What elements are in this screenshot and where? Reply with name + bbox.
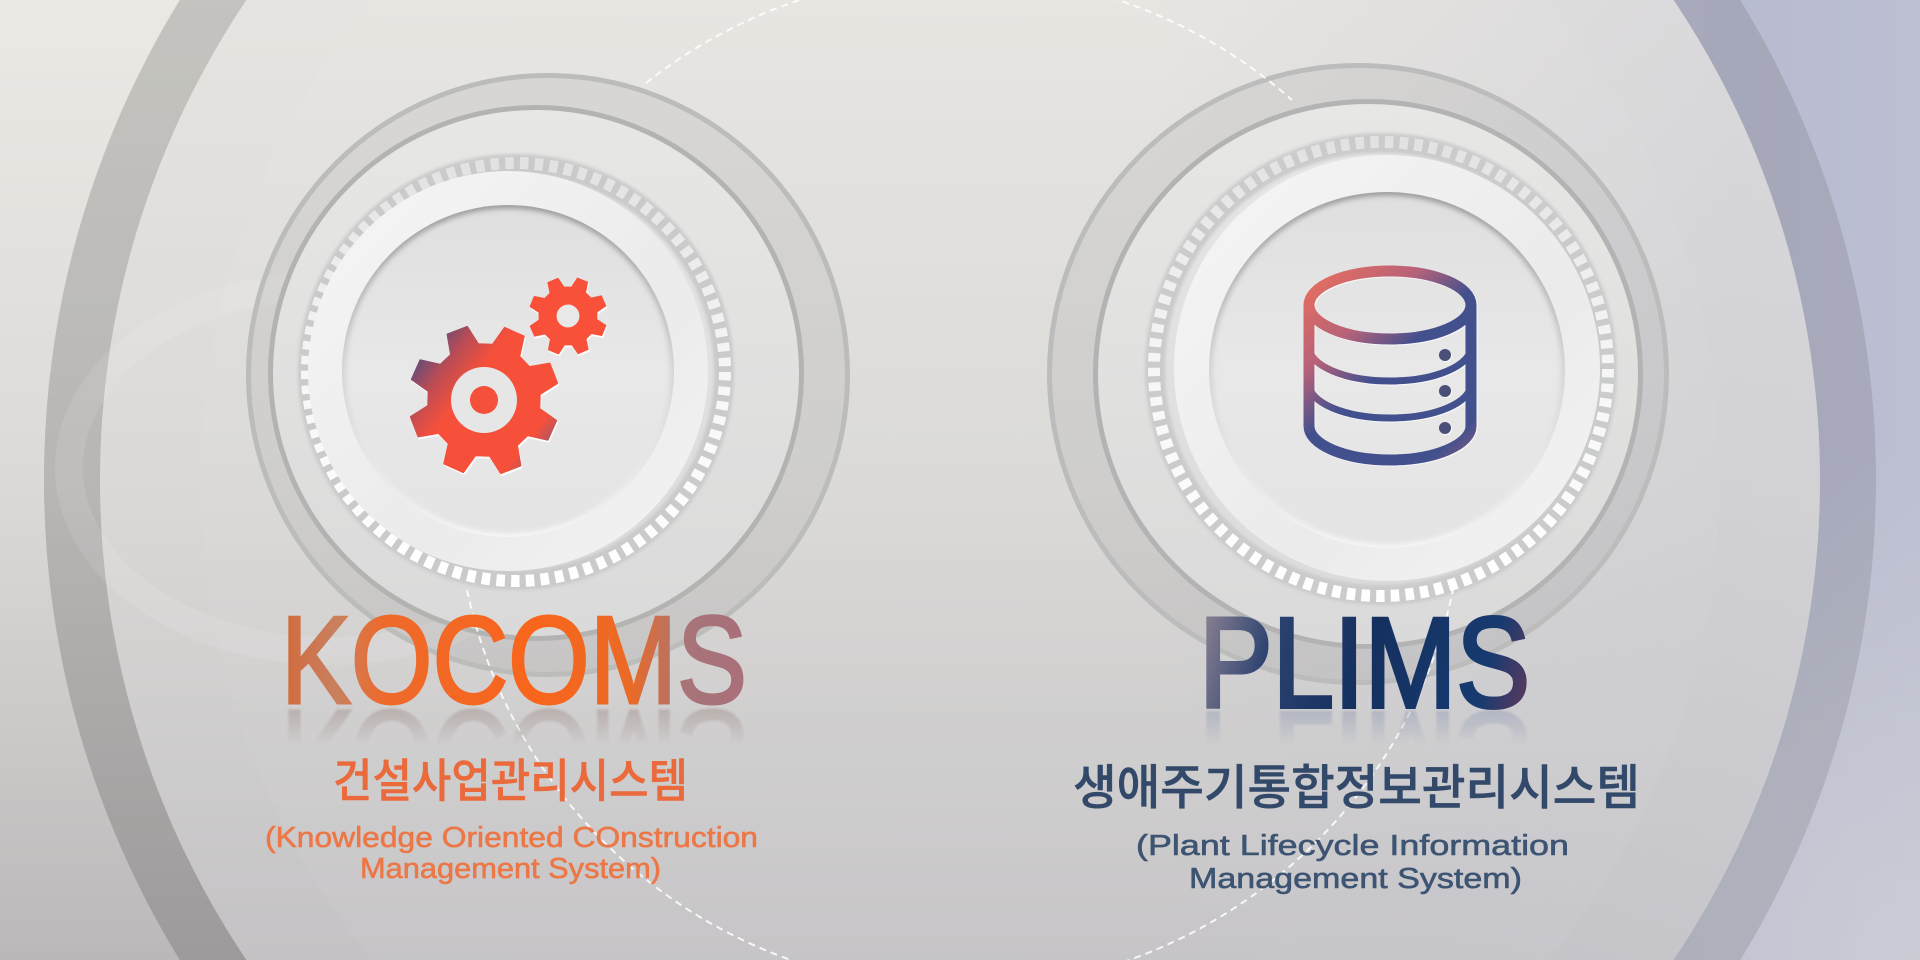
icon: gears <box>411 277 607 473</box>
panel: PLIMS title block <box>1073 592 1640 895</box>
icon: large gear <box>411 327 557 473</box>
heading reflection: PLIMS: PLIMS <box>1199 685 1530 828</box>
text: English name line 1: (Knowledge Oriented COnstruction <box>265 822 758 854</box>
panel: KOCOMS title block <box>265 592 758 885</box>
text: Korean name: 건설사업관리시스템 <box>333 755 688 807</box>
text: English name line 1: (Plant Lifecycle Information <box>1136 830 1569 862</box>
text: Korean name: 생애주기통합정보관리시스템 <box>1073 762 1640 815</box>
icon: database <box>1309 271 1471 460</box>
heading: KOCOMS: KOCOMS <box>281 592 747 730</box>
text: English name line 2: Management System) <box>1189 863 1522 895</box>
panel: KOCOMS ring emblem <box>248 76 848 674</box>
text: English name line 2: Management System) <box>360 853 661 885</box>
dashed circle arcs <box>467 0 1453 960</box>
panel: PLIMS ring emblem <box>1050 66 1666 682</box>
heading: PLIMS: PLIMS <box>1199 592 1530 735</box>
heading reflection: KOCOMS: KOCOMS <box>281 684 747 822</box>
icon: small gear <box>529 277 607 355</box>
